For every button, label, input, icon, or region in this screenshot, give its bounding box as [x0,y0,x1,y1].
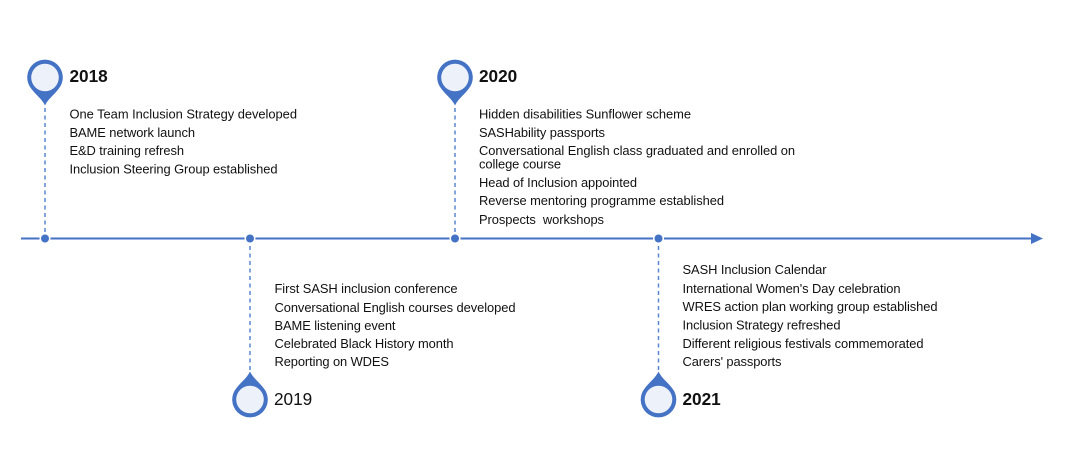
list 2019: First SASH inclusion conference [274,281,458,296]
icon: pin 2018 [27,60,63,106]
list 2018: Inclusion Steering Group established [70,162,278,176]
icon: pin 2020 [437,60,473,106]
list 2019 [274,281,516,369]
list 2020: Head of Inclusion appointed [479,175,637,190]
connector 2018 [44,108,46,235]
axis marker 2018 [41,234,49,242]
list 2018 [70,106,297,176]
list 2020: SASHability passports [479,125,605,140]
list 2020 [479,106,795,227]
heading 2021: 2021 [682,389,721,409]
list 2020: college course [479,156,561,172]
connector 2021 [658,246,660,370]
axis marker 2020 [451,234,459,242]
list 2018: E&D training refresh [70,143,184,158]
connector 2019 [249,246,251,370]
axis marker 2021 [654,234,662,242]
heading 2019: 2019 [274,389,312,409]
list 2021: Inclusion Strategy refreshed [682,318,840,332]
connector 2020 [454,108,456,235]
milestone 2018 [27,60,297,242]
list 2021: WRES action plan working group established [682,299,938,314]
list 2021: Different religious festivals commemorated [682,336,924,351]
list 2021: International Women's Day celebration [682,281,900,296]
milestone 2020 [437,60,795,242]
timeline axis arrow [21,233,1043,244]
list 2020: Reverse mentoring programme established [479,193,724,208]
icon: pin 2019 [232,372,268,417]
list 2019: Conversational English courses developed [274,300,516,315]
axis marker 2019 [246,234,254,242]
list 2019: Celebrated Black History month [274,336,454,351]
milestone 2021 [641,234,938,417]
list 2018: BAME network launch [70,125,195,140]
list 2019: BAME listening event [274,318,396,333]
list 2019: Reporting on WDES [274,354,389,369]
list 2020: Prospects workshops [479,212,604,227]
list 2021: SASH Inclusion Calendar [682,262,827,277]
milestone 2019 [232,234,515,417]
icon: pin 2021 [641,372,676,417]
list 2018: One Team Inclusion Strategy developed [70,106,297,122]
list 2020: Conversational English class graduated and enrolled on [479,143,795,158]
list 2021 [682,262,938,369]
heading 2020: 2020 [479,66,517,86]
heading 2018: 2018 [70,66,108,86]
list 2021: Carers' passports [682,354,782,369]
list 2020: Hidden disabilities Sunflower scheme [479,106,691,122]
